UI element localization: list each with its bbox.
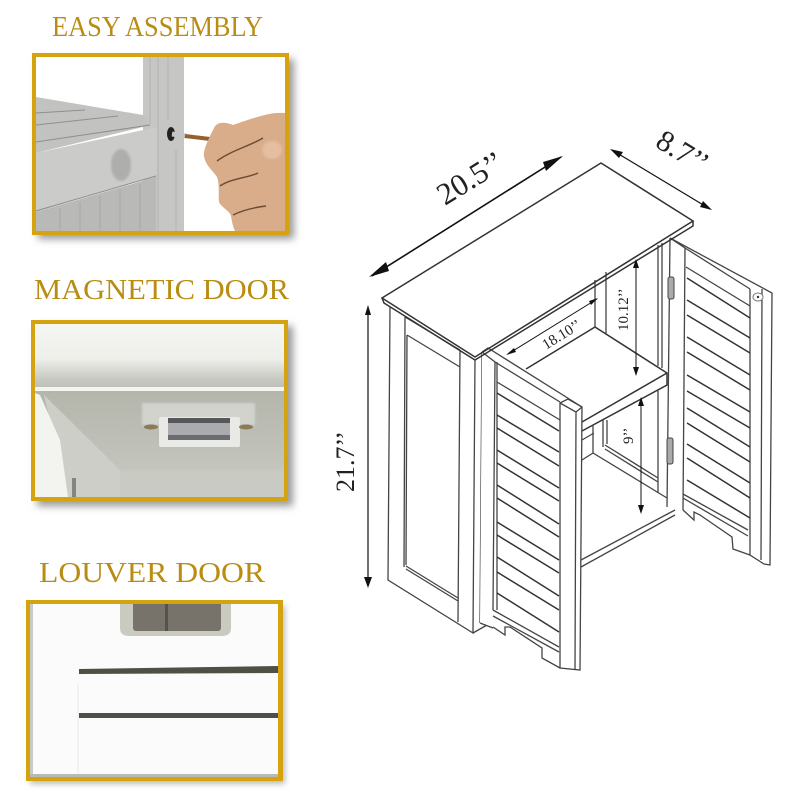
- heading: louver door: LOUVER DOOR: [39, 557, 266, 589]
- hand: [204, 113, 285, 231]
- panel: easy assembly photo: [32, 53, 294, 239]
- dimension: 8.7 depth: [610, 124, 715, 210]
- dimension: 10.12 upper height: 10.12’’: [616, 288, 632, 331]
- white side wall: [35, 393, 68, 497]
- shelf front rail: [36, 130, 143, 212]
- cabinet line drawing: [382, 163, 772, 670]
- louver slots: [79, 666, 278, 718]
- dimension: 21.7 height: [331, 305, 372, 588]
- dimension: 10.12 upper height: [616, 259, 639, 376]
- panel: louver door photo: [26, 600, 285, 784]
- wooden post: [143, 57, 184, 231]
- cabinet interior: [35, 391, 284, 412]
- left door: [480, 348, 582, 670]
- handle notch: [120, 604, 231, 636]
- right door: [667, 238, 772, 565]
- heading: easy assembly: EASY ASSEMBLY: [52, 11, 263, 43]
- magnetic catch: [142, 403, 255, 447]
- cabinet top: [382, 163, 693, 360]
- shelf panel below: [36, 177, 156, 231]
- dimension: 9 lower height: 9’’: [621, 428, 637, 444]
- left side panel: [388, 307, 487, 633]
- hinges: [667, 277, 674, 464]
- panel: magnetic door photo: [31, 320, 293, 506]
- screwdriver: [172, 134, 210, 139]
- dimension: 20.5 width: [369, 144, 563, 277]
- dimension: 18.10 shelf width: 18.10’’: [540, 317, 584, 353]
- dimension: 21.7 height: 21.7’’: [331, 431, 360, 492]
- screw hole: [167, 127, 175, 141]
- left door louvers: [497, 393, 559, 632]
- shelf top: [36, 97, 151, 153]
- dimension: 9 lower height: [621, 397, 644, 514]
- top shelf edge: [35, 324, 284, 380]
- dimension: 20.5 width: 20.5’’: [430, 144, 510, 212]
- interior back and shelf: [526, 238, 675, 567]
- dimension: 18.10 shelf width: [506, 298, 598, 355]
- right door louvers: [687, 278, 750, 518]
- left door foot: [493, 610, 560, 668]
- heading: magnetic door: MAGNETIC DOOR: [34, 274, 290, 306]
- dimension: 8.7 depth: 8.7’’: [650, 124, 715, 180]
- bamboo node: [111, 149, 131, 181]
